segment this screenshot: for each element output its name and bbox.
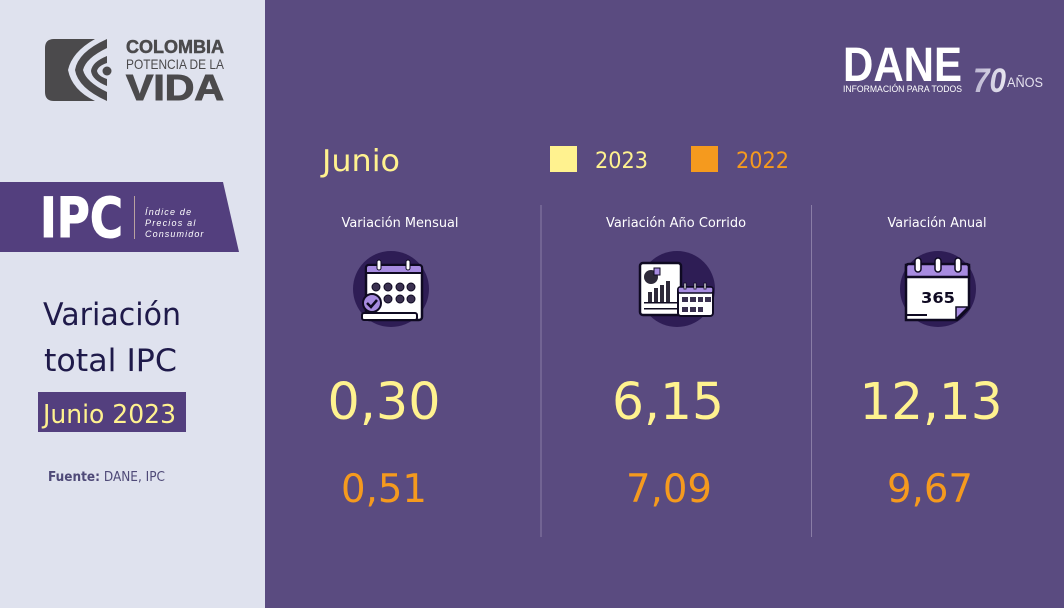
source note: Fuente: DANE, IPC (48, 470, 165, 485)
banner: IPC: Precios al (145, 218, 197, 228)
heading: Variación total IPC: total IPC (44, 343, 177, 379)
column heading: Variación Anual (888, 216, 986, 231)
icon: report and calendar (639, 251, 715, 327)
logo: DANE 70 años: INFORMACIÓN PARA TODOS (843, 84, 962, 95)
legend: 2022: 2022 (736, 149, 789, 174)
panel: main background (265, 0, 1064, 608)
logo: Colombia Potencia de la Vida (45, 37, 225, 108)
column: Variación Mensual (328, 216, 458, 512)
value 2023: 6,15 (612, 373, 724, 432)
column heading: Variación Año Corrido (606, 216, 746, 231)
panel: sidebar (0, 0, 265, 608)
value 2022: 0,51 (341, 467, 427, 512)
label: Junio 2023: Junio 2023 (41, 400, 176, 430)
logo: DANE 70 años (843, 39, 1043, 100)
icon: calendar 365 (900, 251, 976, 327)
logo: DANE 70 años: 70 (973, 62, 1006, 100)
legend: 2022 (691, 146, 789, 174)
heading: Junio: Junio (320, 144, 400, 179)
logo: Colombia Potencia de la Vida: COLOMBIA (126, 37, 224, 57)
column: Variación Anual (860, 216, 1002, 512)
value 2022: 9,67 (887, 467, 973, 512)
logo: DANE 70 años: AÑOS (1007, 75, 1043, 90)
logo: Colombia Potencia de la Vida: POTENCIA DE LA (126, 56, 225, 72)
banner: IPC: Índice de (145, 207, 192, 217)
legend: 2023 (550, 146, 648, 174)
banner: IPC (0, 182, 239, 252)
banner: IPC: Consumidor (145, 229, 205, 239)
value 2023: 0,30 (328, 373, 440, 432)
legend: 2023: 2023 (595, 149, 648, 174)
banner: IPC: IPC (40, 186, 123, 250)
logo: Colombia Potencia de la Vida: VIDA (126, 67, 224, 108)
value 2022: 7,09 (626, 467, 712, 512)
logo: DANE 70 años: DANE (843, 39, 962, 92)
heading: Variación total IPC: Variación (43, 297, 181, 333)
column heading: Variación Mensual (342, 216, 458, 231)
icon: calendar with check (353, 251, 429, 327)
value 2023: 12,13 (860, 373, 1002, 432)
heading: Variación total IPC (43, 297, 181, 379)
column: Variación Año Corrido (606, 216, 746, 512)
icon: calendar 365: 365 (921, 289, 955, 307)
